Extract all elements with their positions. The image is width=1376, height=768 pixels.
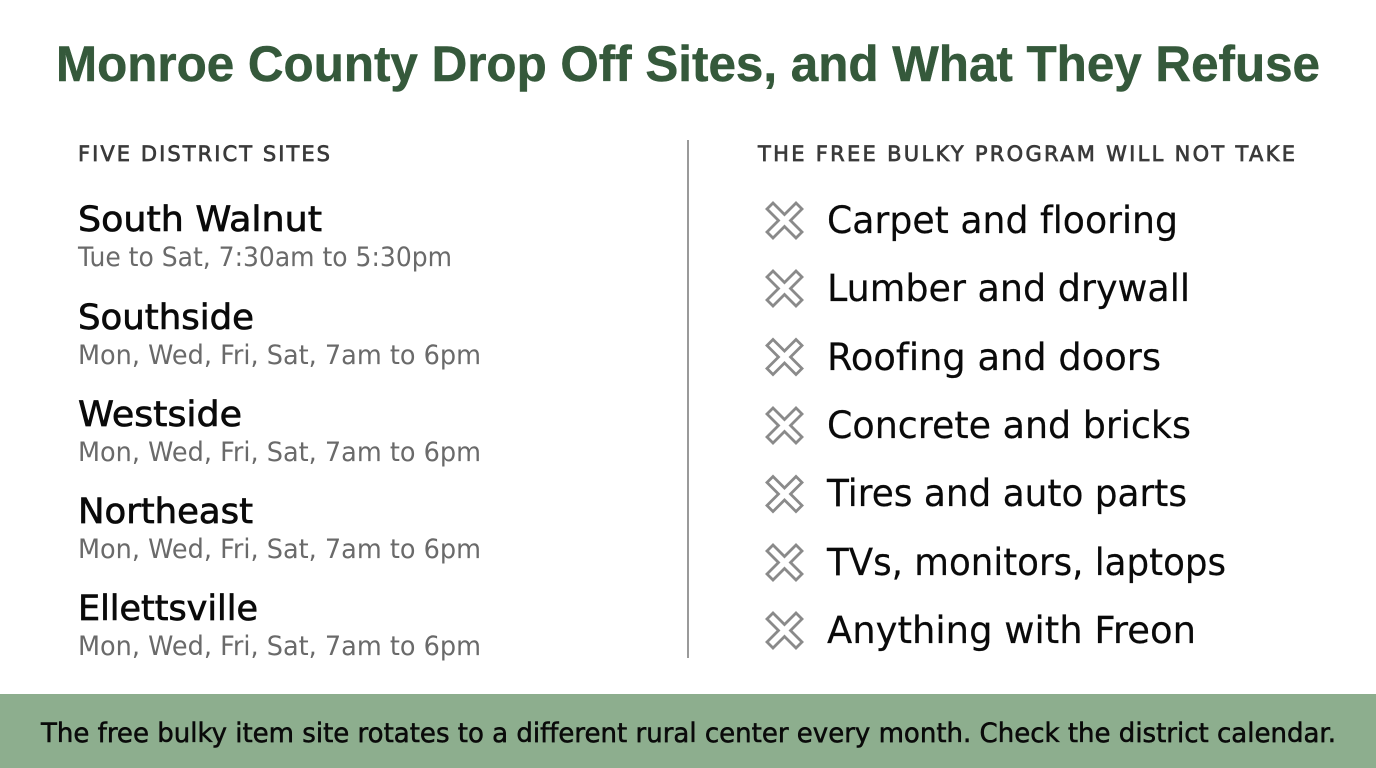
- item: anything with freon: Anything with Freon: [827, 609, 1196, 652]
- title: Monroe County Drop Off Sites, and What They Refuse: [56, 36, 1320, 92]
- panel: five district sites: [77, 142, 481, 662]
- site: Northeast: Northeast: [78, 492, 253, 532]
- site: Southside: [78, 298, 481, 371]
- site: Southside: Southside: [78, 298, 254, 338]
- site: South Walnut: [77, 200, 452, 273]
- site: Ellettsville: Mon, Wed, Fri, Sat, 7am to 6pm: [78, 631, 481, 662]
- item: roofing and doors: Roofing and doors: [827, 336, 1161, 379]
- site: Ellettsville: [78, 589, 481, 662]
- heading: five district sites: FIVE DISTRICT SITES: [78, 142, 330, 166]
- footer banner: The free bulky item site rotates to a different rural center every month. Check the district calendar.: [40, 718, 1336, 749]
- item: tvs monitors laptops: TVs, monitors, laptops: [826, 541, 1226, 584]
- site: Westside: [78, 395, 481, 468]
- item: lumber and drywall: Lumber and drywall: [827, 267, 1190, 310]
- site: Northeast: [78, 492, 481, 565]
- item: carpet and flooring: Carpet and flooring: [827, 199, 1178, 242]
- site: Southside: Mon, Wed, Fri, Sat, 7am to 6pm: [78, 340, 481, 371]
- site: Northeast: Mon, Wed, Fri, Sat, 7am to 6pm: [78, 534, 481, 565]
- site: South Walnut: Tue to Sat, 7:30am to 5:30pm: [77, 242, 452, 273]
- panel: refused items: [757, 142, 1295, 652]
- item: concrete and bricks: Concrete and bricks: [827, 404, 1191, 447]
- site: Westside: Mon, Wed, Fri, Sat, 7am to 6pm: [78, 437, 481, 468]
- site: South Walnut: South Walnut: [78, 200, 322, 240]
- footer banner: [0, 694, 1376, 768]
- item: tires and auto parts: Tires and auto parts: [826, 472, 1187, 515]
- heading: will not take: THE FREE BULKY PROGRAM WILL NOT TAKE: [757, 142, 1295, 166]
- site: Westside: Westside: [78, 395, 242, 435]
- site: Ellettsville: Ellettsville: [78, 589, 258, 629]
